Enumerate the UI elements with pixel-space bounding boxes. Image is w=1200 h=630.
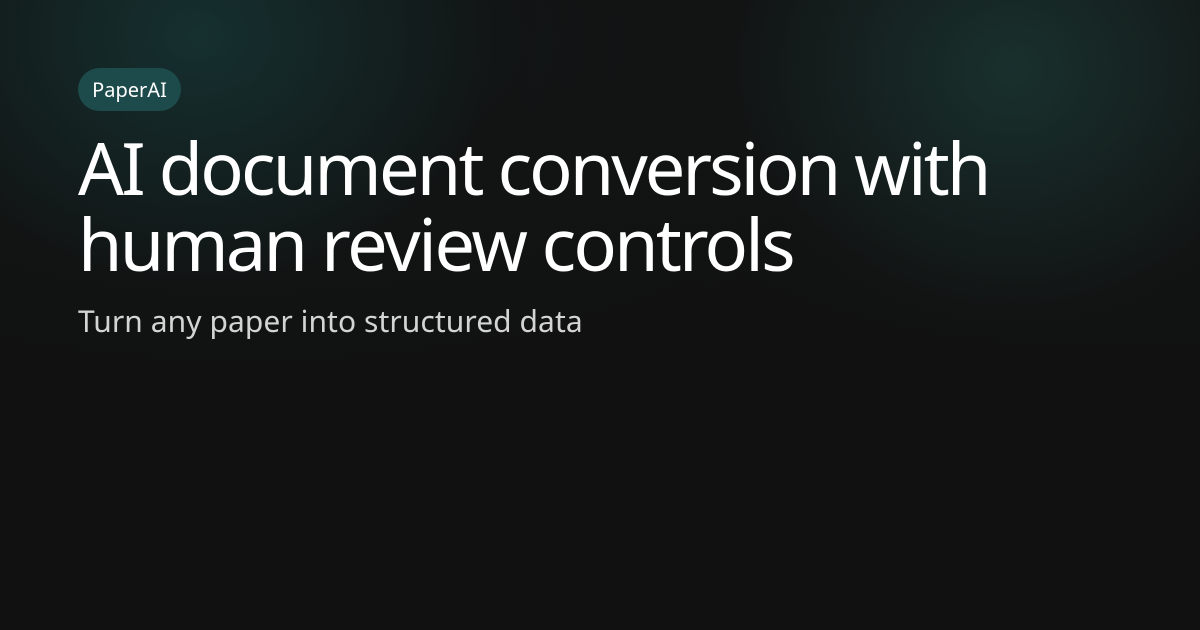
subtitle: Turn any paper into structured data [78,300,583,341]
title: human review controls [78,195,793,293]
badge: PaperAI [78,68,181,111]
title: AI document conversion with [78,119,989,217]
badge: PaperAI: PaperAI [92,76,167,103]
title [78,119,989,293]
